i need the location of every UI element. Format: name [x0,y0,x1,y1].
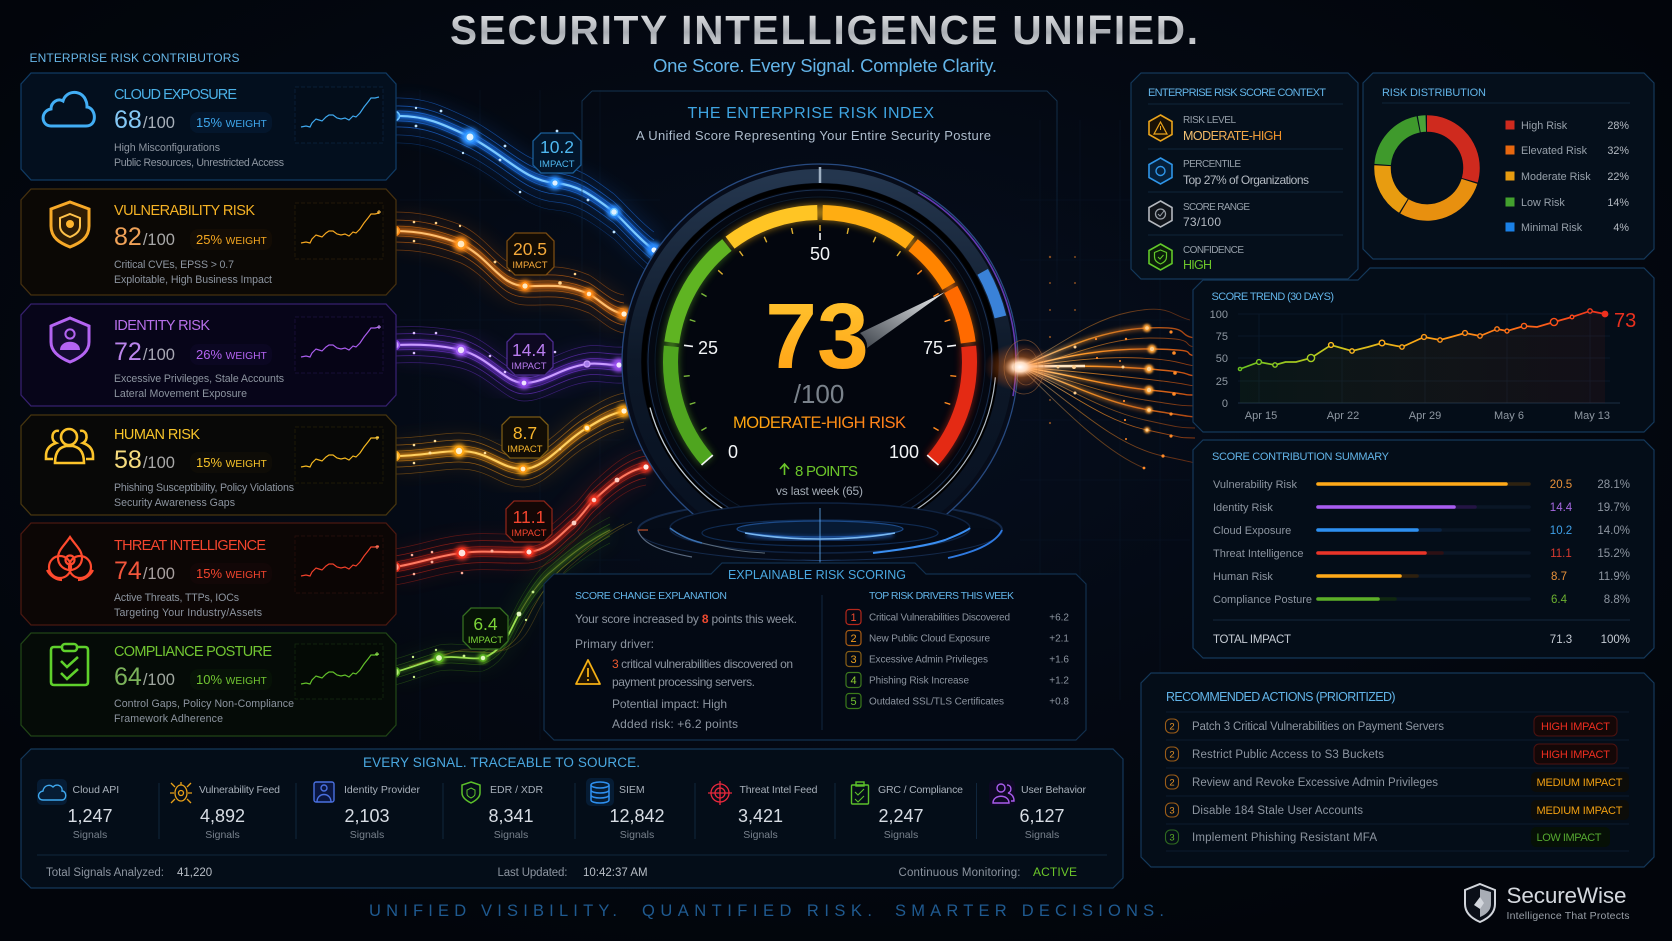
distribution legend: 28% [1607,120,1629,132]
contribution row labels: Human Risk [1213,571,1273,583]
icon: shield [51,202,89,247]
description: Targeting Your Industry/Assets [114,607,262,619]
burst emitter at gauge edge [984,340,1056,394]
gauge scale labels: 75 [923,338,943,358]
weight: 10% WEIGHT [196,672,268,687]
total row: TOTAL IMPACT [1213,634,1291,646]
icon: biohazard [47,537,93,580]
context row: score range: 73/100 [1183,215,1221,229]
icon: identity shield [51,318,89,362]
weight: 15% WEIGHT [196,566,268,581]
contribution percentages: 8.8% [1604,594,1630,606]
panel: vulnerability risk card [21,189,396,295]
score: 64/100 [114,663,175,691]
weight: 15% WEIGHT [196,455,268,470]
tagline: SMARTER DECISIONS. [895,902,1164,920]
panel: recommended actions: 2 [1169,722,1175,732]
description: Lateral Movement Exposure [114,388,247,400]
gauge scale labels: 50 [810,244,830,264]
description: Excessive Privileges, Stale Accounts [114,373,284,385]
badge: human impact [502,417,548,458]
top risk drivers [846,590,1069,708]
panel: human risk card [21,415,396,515]
gauge [552,94,1088,630]
donut chart [1366,107,1488,229]
badge: human impact: 8.7 [513,423,537,443]
card title: THREAT INTELLIGENCE [114,538,266,554]
gauge colour arc [609,151,1031,573]
contribution row labels: Threat Intelligence [1213,548,1304,560]
distribution heading: RISK DISTRIBUTION [1382,87,1486,99]
source: user behavior: Signals [1025,829,1059,841]
panel: recommended actions: 3 [1169,806,1175,816]
trend heading: SCORE TREND (30 DAYS) [1212,291,1334,303]
top risk drivers: +6.2 [1049,612,1069,624]
impact pills: MEDIUM IMPACT [1536,777,1623,789]
panel: score contribution summary [1193,440,1654,658]
source: threat intel feed [708,781,818,841]
weight [190,229,272,250]
contribution row labels: Identity Risk [1213,502,1273,514]
badge: cloud impact [533,133,581,173]
gauge colour arc glow [609,151,1031,573]
panel: cloud exposure card [21,73,396,180]
action descriptions: Review and Revoke Excessive Admin Privileges [1192,777,1438,789]
source: vulnerability feed: Vulnerability Feed [199,784,280,796]
distribution legend: 4% [1613,222,1629,234]
distribution legend: 32% [1607,145,1629,157]
line chart: Apr 22 [1327,410,1359,422]
flow: cloud exposure stream [390,98,662,277]
top risk drivers: +2.1 [1049,634,1069,644]
contribution row labels: Cloud Exposure [1213,525,1291,537]
signals footer [46,865,1077,879]
source: threat intel feed: Threat Intel Feed [740,784,818,796]
panel: recommended actions: 3 [1169,832,1175,844]
weekly change: 8 POINTS [795,463,858,480]
source: siem [586,778,665,841]
contribution percentages: 19.7% [1597,502,1630,514]
top risk drivers: New Public Cloud Exposure [869,634,990,644]
action descriptions: Implement Phishing Resistant MFA [1192,832,1377,844]
source: cloud api: 1,247 [67,806,113,826]
card title: HUMAN RISK [114,427,200,443]
weight: 15% WEIGHT [196,115,268,130]
title: SECURITY INTELLIGENCE UNIFIED. [450,7,1198,53]
signals footer: Last Updated: [498,867,568,879]
score change explanation: Your score increased by 8 points this week. [575,612,797,626]
signals footer: 10:42:37 AM [583,867,648,879]
score: 74/100 [114,557,175,585]
panel: signal sources [21,749,1123,888]
panel: threat intelligence card [21,523,396,625]
line chart: May 13 [1574,410,1610,422]
source: cloud api: Cloud API [72,784,119,796]
flow: human risk stream [390,393,631,487]
context row: confidence: CONFIDENCE [1183,245,1244,256]
contribution values: 6.4 [1551,594,1568,606]
signals footer: Total Signals Analyzed: [46,867,164,879]
badge: threat impact [506,501,552,542]
action priority badges [1166,719,1178,844]
source: grc compliance: GRC / Compliance [878,784,963,796]
panel: recommended actions: 2 [1169,778,1175,788]
description: Security Awareness Gaps [114,497,235,509]
action descriptions: Patch 3 Critical Vulnerabilities on Payment Servers [1192,721,1444,733]
source: grc compliance [852,782,963,841]
total row: 100% [1601,634,1630,646]
icon: logo shield [1465,884,1495,922]
flow: threat intelligence stream [390,449,652,585]
weight [190,452,272,473]
index subheading: A Unified Score Representing Your Entire Security Posture [636,128,991,143]
logo: securewise: SecureWise [1506,883,1626,908]
tagline [369,902,1164,920]
line chart: May 6 [1494,410,1524,422]
top risk drivers: TOP RISK DRIVERS THIS WEEK [869,590,1014,602]
source: identity provider: 2,103 [344,806,390,826]
badge: identity impact: IMPACT [511,361,547,372]
gauge scale labels [698,244,943,462]
score: 72/100 [114,338,175,366]
badge: compliance impact: 6.4 [473,614,498,634]
distribution legend: High Risk [1521,120,1568,132]
context row: percentile [1149,158,1309,187]
source: siem: 12,842 [609,806,665,826]
top risk drivers: 3 [850,654,857,666]
context row: risk level: MODERATE-HIGH [1183,129,1282,143]
gauge scale labels: 25 [698,338,718,358]
description: Exploitable, High Business Impact [114,274,272,286]
score change explanation: Primary driver: [575,637,654,651]
score: 68/100 [114,106,175,134]
icon: warning triangle [576,660,600,684]
logo: securewise: Intelligence That Protects [1506,910,1630,922]
contribution percentages: 11.9% [1598,571,1630,583]
contribution values: 11.1 [1550,548,1572,560]
source: vulnerability feed [170,782,280,841]
icon: cloud [43,92,94,126]
description: Public Resources, Unrestricted Access [114,157,284,169]
pedestal back ring [638,500,1002,560]
flow: identity risk stream [390,327,626,401]
heading: enterprise risk contributors: ENTERPRISE RISK CONTRIBUTORS [30,51,240,65]
top risk drivers: Outdated SSL/TLS Certificates [869,696,1004,708]
contribution values: 10.2 [1550,525,1572,537]
score change explanation [575,590,797,731]
contribution row labels: Vulnerability Risk [1213,479,1297,491]
panel heading: EXPLAINABLE RISK SCORING [728,568,906,582]
badge: cloud impact: 10.2 [540,137,574,157]
panel: identity risk card [21,304,396,406]
line chart: 0 [1222,398,1228,410]
line chart [1210,309,1620,422]
source: siem: SIEM [619,784,645,796]
score change explanation: Potential impact: High [612,697,727,711]
badge: compliance impact: IMPACT [468,635,503,646]
description: Phishing Susceptibility, Policy Violations [114,482,294,494]
source: user behavior: User Behavior [1021,784,1086,796]
panel: score trend [1193,268,1654,432]
source: cloud api: Signals [73,829,107,841]
source: cloud api [37,779,119,841]
badge: human impact: IMPACT [507,444,543,455]
source: vulnerability feed: Signals [205,829,240,841]
source: threat intel feed: 3,421 [738,806,783,826]
signals footer: Continuous Monitoring: [898,867,1020,879]
context row: confidence: HIGH [1183,258,1212,272]
source: edr xdr: EDR / XDR [490,784,544,796]
contribution row labels [1213,479,1312,606]
line chart: 100 [1210,309,1228,321]
line chart: 25 [1216,376,1228,388]
top risk drivers: Phishing Risk Increase [869,676,969,686]
panel: compliance posture card [21,633,396,736]
tagline: UNIFIED VISIBILITY. [369,902,617,920]
gauge pedestal [638,503,1002,566]
action descriptions: Disable 184 Stale User Accounts [1192,805,1363,817]
badge: vulnerability impact: IMPACT [512,260,548,271]
source: user behavior [989,780,1086,841]
icon: people [46,429,93,463]
score change explanation: SCORE CHANGE EXPLANATION [575,590,727,602]
weight [190,112,272,133]
context row: risk level [1149,115,1282,143]
description: High Misconfigurations [114,142,220,154]
panel: explainable risk scoring [544,563,1086,740]
badge: compliance impact [463,608,508,649]
context row: confidence [1149,244,1244,272]
impact pills: LOW IMPACT [1536,832,1602,844]
top risk drivers: +1.6 [1049,654,1069,666]
distribution legend: Low Risk [1521,197,1565,209]
context heading: ENTERPRISE RISK SCORE CONTEXT [1148,87,1326,99]
subtitle: One Score. Every Signal. Complete Clarity. [653,55,997,76]
contribution heading: SCORE CONTRIBUTION SUMMARY [1212,451,1390,463]
description: Framework Adherence [114,713,223,725]
distribution legend: Minimal Risk [1521,222,1583,234]
contribution percentages [1597,479,1630,606]
score change explanation: Added risk: +6.2 points [612,717,738,731]
badge: vulnerability impact: 20.5 [513,239,547,259]
context row: percentile: PERCENTILE [1183,159,1241,170]
panel: enterprise risk index header [582,91,1057,300]
contribution values [1550,479,1573,606]
sparkline [295,644,383,699]
distribution legend: 14% [1607,197,1629,209]
badge: identity impact: 14.4 [512,340,546,360]
burst signal dots [1049,195,1177,469]
source: grc compliance: 2,247 [878,806,924,826]
signals footer: ACTIVE [1033,865,1077,879]
top risk drivers: 2 [850,633,857,645]
impact pills [1531,716,1629,847]
score change explanation: payment processing servers. [612,675,755,689]
source: identity provider: Signals [350,829,384,841]
icon: clipboard [51,644,88,685]
description: Critical CVEs, EPSS > 0.7 [114,259,234,271]
badge: threat impact: 11.1 [513,507,545,527]
context row: score range [1149,201,1250,229]
score change explanation: 3 critical vulnerabilities discovered on [612,657,793,671]
panel: risk distribution [1363,73,1654,259]
top risk drivers: Excessive Admin Privileges [869,654,988,666]
gauge ticks [684,225,956,465]
line chart: Apr 29 [1409,410,1441,422]
description: Control Gaps, Policy Non-Compliance [114,698,294,710]
contribution percentages: 15.2% [1597,548,1630,560]
card title: COMPLIANCE POSTURE [114,644,272,660]
total row [1213,634,1630,646]
source: user behavior: 6,127 [1019,806,1065,826]
score: 58/100 [114,446,175,474]
gauge needle [860,292,945,348]
impact pills: HIGH IMPACT [1541,721,1610,733]
line chart: 75 [1216,331,1228,343]
score value: 73 [765,284,869,388]
flow: compliance posture stream [390,517,632,685]
badge: threat impact: IMPACT [511,528,547,539]
card title: VULNERABILITY RISK [114,203,255,219]
weight [190,669,272,690]
trend end value: 73 [1614,310,1636,332]
source: edr xdr [462,782,544,841]
gauge ring highlights [552,94,1088,630]
badge: vulnerability impact [507,233,554,275]
sparkline [295,536,383,593]
weight: 26% WEIGHT [196,347,268,362]
top risk drivers: 4 [850,675,857,687]
contribution percentages: 14.0% [1597,525,1630,537]
tagline: QUANTIFIED RISK. [642,902,872,920]
distribution legend: 22% [1607,171,1629,183]
panel: recommended actions: 2 [1169,750,1175,760]
distribution legend: Elevated Risk [1521,145,1588,157]
impact pills: MEDIUM IMPACT [1536,805,1623,817]
contribution values: 8.7 [1551,571,1567,583]
distribution legend [1506,120,1629,234]
source: threat intel feed: Signals [743,829,778,841]
distribution legend: Moderate Risk [1521,171,1591,183]
contribution values: 14.4 [1550,502,1573,514]
impact pills: HIGH IMPACT [1541,749,1610,761]
flow: vulnerability risk stream [390,212,631,333]
score: 82/100 [114,223,175,251]
description: Active Threats, TTPs, IOCs [114,592,239,604]
weight [190,563,272,584]
top risk drivers: 5 [850,696,857,708]
sparkline [295,87,383,143]
weight [190,344,272,365]
contribution values: 20.5 [1550,479,1572,491]
sparkline [295,427,383,483]
top risk drivers: +1.2 [1049,676,1069,686]
context row: risk level: RISK LEVEL [1183,115,1236,126]
actions heading: RECOMMENDED ACTIONS (PRIORITIZED) [1166,690,1396,704]
sparkline [295,203,383,259]
signals footer: 41,220 [177,867,212,879]
score out of 100: /100 [794,379,844,409]
action descriptions [1192,721,1444,844]
source: vulnerability feed: 4,892 [200,806,245,826]
source: edr xdr: Signals [494,829,528,841]
line chart: Apr 15 [1245,410,1277,422]
panel: recommended actions [1141,673,1654,867]
gauge scale labels: 100 [889,442,919,462]
top risk drivers: +0.8 [1049,696,1069,708]
line chart: 50 [1216,353,1228,365]
risk band label: MODERATE-HIGH RISK [733,414,906,432]
source: grc compliance: Signals [884,829,918,841]
sparkline [295,317,383,373]
context row: percentile: Top 27% of Organizations [1183,173,1309,187]
top risk drivers: 1 [850,612,857,624]
index heading: THE ENTERPRISE RISK INDEX [688,105,934,122]
card title: IDENTITY RISK [114,318,210,334]
arrow: output signal burst [1020,309,1195,468]
background grid [400,90,1190,740]
panel: enterprise risk score context [1131,73,1358,279]
badge: identity impact [507,334,553,375]
source: identity provider [314,782,420,841]
gauge scale labels: 0 [728,442,738,462]
contribution percentages: 28.1% [1597,479,1630,491]
context row: score range: SCORE RANGE [1183,202,1250,213]
comparison note: vs last week (65) [776,484,863,498]
badge: cloud impact: IMPACT [539,159,575,170]
signals heading: EVERY SIGNAL. TRACEABLE TO SOURCE. [363,755,640,770]
action descriptions: Restrict Public Access to S3 Buckets [1192,749,1384,761]
contribution row labels: Compliance Posture [1213,594,1312,606]
source: edr xdr: 8,341 [488,806,534,826]
source: identity provider: Identity Provider [344,784,420,796]
card title: CLOUD EXPOSURE [114,87,237,103]
source: siem: Signals [620,829,654,841]
total row: 71.3 [1550,634,1572,646]
top risk drivers: Critical Vulnerabilities Discovered [869,612,1010,624]
weight: 25% WEIGHT [196,232,268,247]
logo: securewise [1465,883,1630,922]
contribution bars [1318,484,1529,599]
